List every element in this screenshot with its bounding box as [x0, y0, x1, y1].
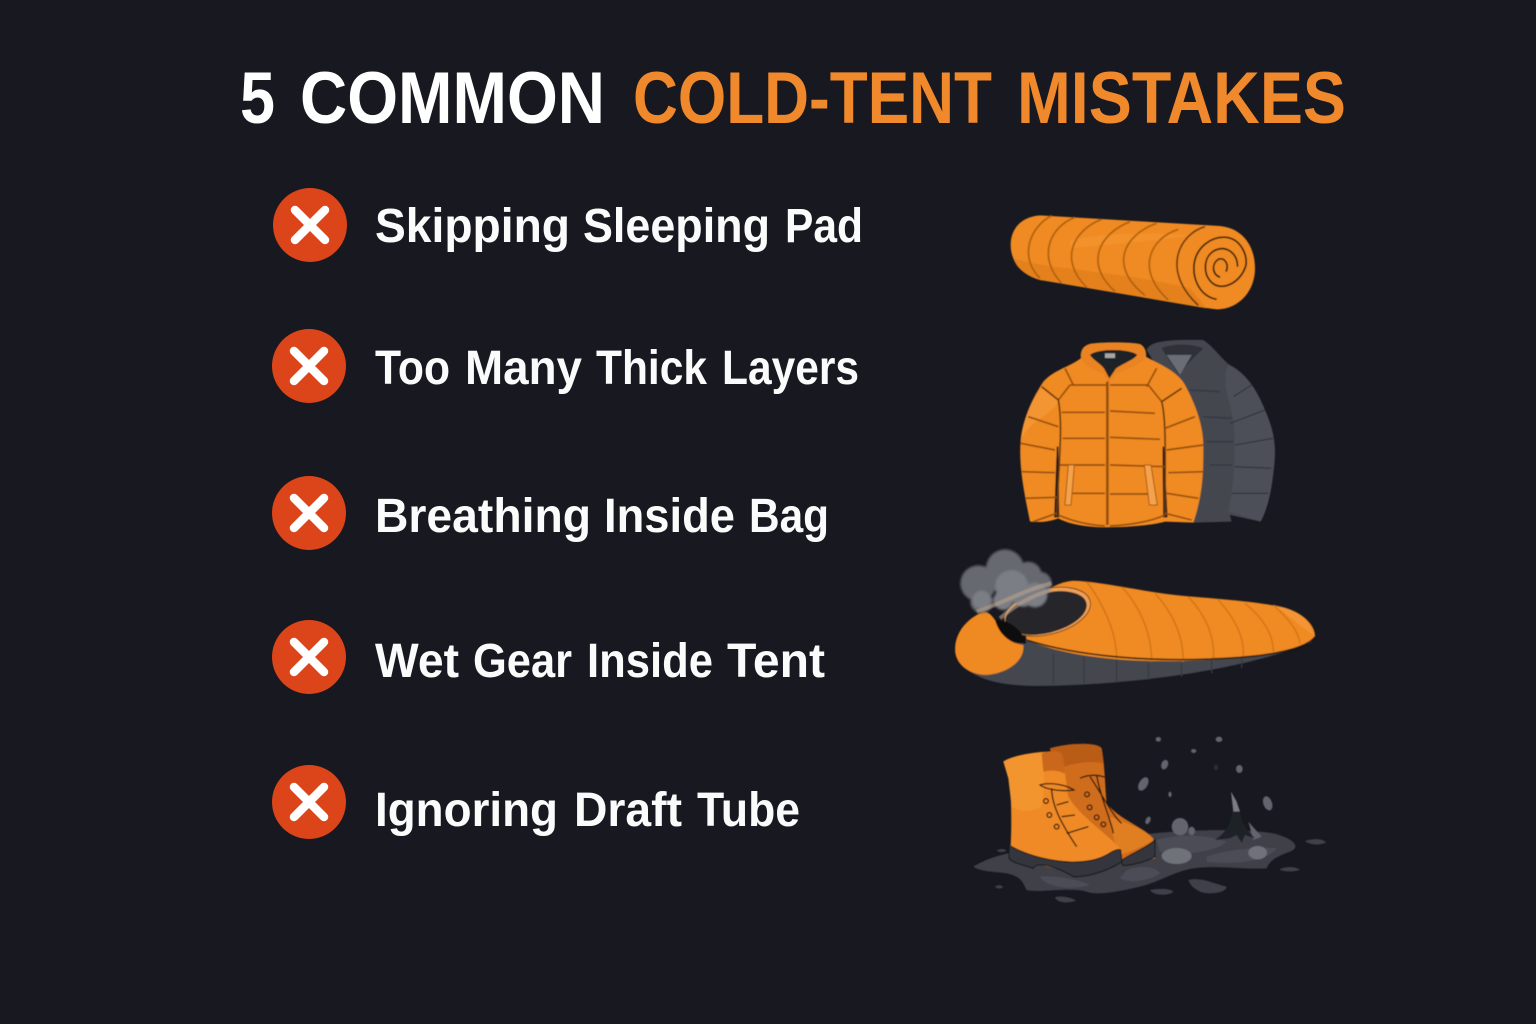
label: Tent	[727, 635, 825, 688]
icon: red x badge	[273, 188, 347, 262]
label	[375, 635, 825, 688]
mistake 4: wet gear inside tent	[272, 620, 825, 694]
foot/hood lobe	[995, 620, 1027, 643]
label	[375, 342, 859, 395]
label: Too	[375, 342, 450, 395]
title: COMMON	[300, 58, 605, 139]
label	[375, 490, 829, 543]
icon: red x badge	[272, 329, 346, 403]
orange jacket	[1020, 342, 1203, 527]
label: Tube	[697, 784, 800, 837]
title	[240, 58, 1346, 139]
mistake 1: skipping sleeping pad	[273, 188, 863, 262]
sleeve gaps	[1055, 447, 1167, 517]
label: Wet	[375, 635, 459, 688]
puddle	[973, 830, 1326, 902]
illustration: orange and gray puffer jackets	[1020, 340, 1275, 527]
mistake 2: too many thick layers	[272, 329, 859, 403]
mistake 5: ignoring draft tube	[272, 765, 800, 839]
label: Draft	[574, 784, 682, 837]
breath cloud	[960, 549, 1052, 613]
illustration: rolled sleeping pad	[1011, 215, 1255, 309]
bag body	[1025, 581, 1315, 661]
icon: red x badge	[272, 620, 346, 694]
front boot	[1003, 751, 1122, 877]
label: Thick	[596, 342, 707, 395]
label: Pad	[785, 200, 863, 253]
splash droplets	[1136, 737, 1274, 864]
label: Sleeping	[583, 200, 770, 253]
collar	[1081, 342, 1146, 383]
label: Inside	[587, 635, 713, 688]
label: Ignoring	[375, 784, 558, 837]
bag underside	[963, 640, 1313, 686]
label: Layers	[722, 342, 859, 395]
label: Gear	[473, 635, 572, 688]
label: Bag	[749, 490, 829, 543]
mistake 3: breathing inside bag	[272, 476, 829, 550]
title: COLD-TENT	[633, 58, 992, 139]
label: Breathing	[375, 490, 591, 543]
label: Inside	[604, 490, 735, 543]
hood opening	[999, 579, 1096, 644]
label: Skipping	[375, 200, 570, 253]
icon: red x badge	[272, 765, 346, 839]
label: Many	[465, 342, 582, 395]
title: 5	[240, 58, 275, 139]
label	[375, 784, 800, 837]
gray jacket	[1147, 340, 1275, 523]
illustration: wet boots in puddle	[973, 737, 1326, 902]
label	[375, 200, 863, 253]
icon: red x badge	[272, 476, 346, 550]
back boot	[1050, 744, 1155, 866]
title: MISTAKES	[1017, 58, 1346, 139]
illustration: sleeping bag with breath cloud	[955, 549, 1315, 686]
